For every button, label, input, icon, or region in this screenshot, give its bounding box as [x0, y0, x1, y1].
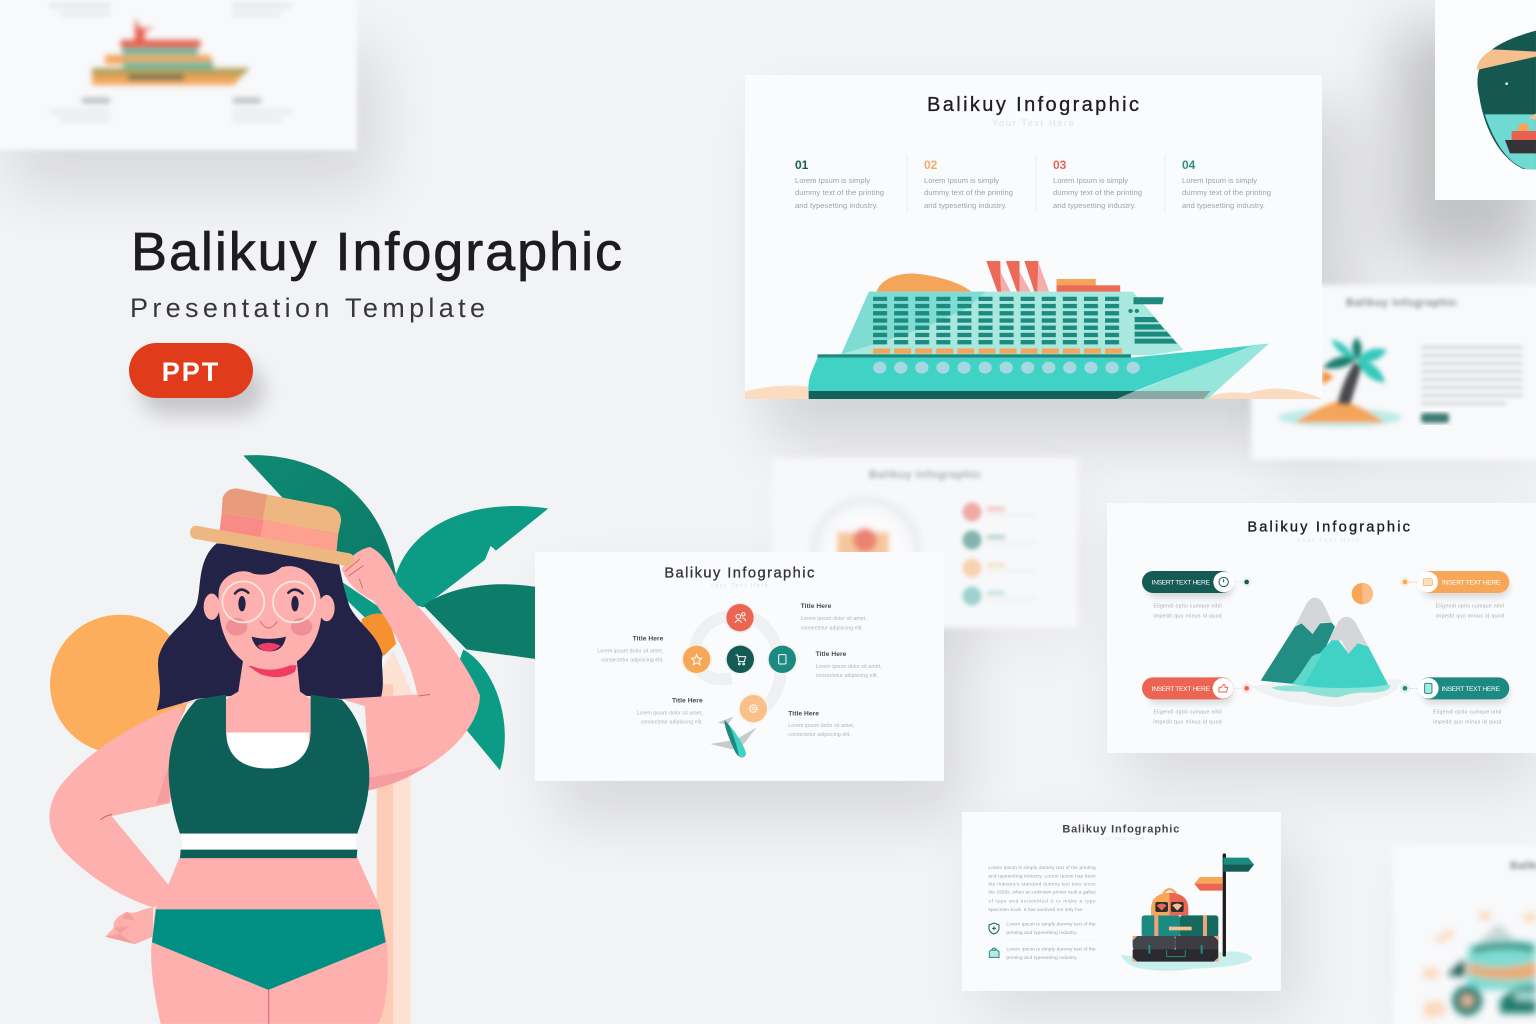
column 02: and typesetting industry. [924, 201, 1007, 210]
balconies [873, 348, 1125, 354]
panel: cruise ship slide [745, 75, 1322, 399]
cheeks [226, 618, 312, 636]
swim top [169, 694, 369, 834]
slide title: Balikuy Infographic [927, 94, 1139, 116]
slide title: Balikuy Infographic [1062, 823, 1179, 835]
paragraph [988, 865, 1096, 912]
column 02: dummy text of the printing [924, 188, 1013, 197]
label: left: Title Here [633, 636, 664, 643]
paragraph: the 1500s, when an unknown printer took a galley [988, 890, 1096, 895]
pill: dark top left [1142, 571, 1252, 598]
item two text: Lorem Ipsum is simply dummy text of the [1006, 946, 1096, 951]
column 01 [795, 158, 884, 210]
hair [157, 543, 383, 711]
captions [1153, 603, 1504, 725]
illustration: palm island [1278, 337, 1402, 427]
illustration: woman with palm and surfboard [49, 455, 548, 1024]
slide title: Balikuy Infographic [1247, 519, 1410, 535]
signpost [1194, 853, 1254, 957]
illustration: ship in sea blob [1477, 31, 1536, 169]
column 03: dummy text of the printing [1053, 188, 1142, 197]
node: people [725, 602, 755, 633]
slide subtitle: Your Text Here [1296, 537, 1360, 544]
label: right: Title Here [816, 651, 847, 658]
heading: blurred slide title: Balikuy Infographic [1346, 297, 1457, 309]
label: bottom left: Title Here [672, 698, 703, 705]
column 03: 03 [1053, 158, 1067, 172]
sun behind woman [50, 615, 190, 754]
surfboard [377, 651, 417, 1024]
neck shadow [248, 665, 297, 677]
pill: red bottom left [1142, 677, 1252, 704]
label: bottom right: Title Here [788, 710, 819, 717]
badge: PPT button [129, 343, 264, 415]
illustration: cruise ship [745, 261, 1322, 399]
illustration: luggage and signpost [1121, 853, 1254, 971]
slide subtitle: Your Text Here [992, 118, 1074, 129]
windows [873, 297, 1121, 345]
illustration: plane [710, 717, 757, 757]
label: bottom left [637, 698, 703, 726]
label: right: Lorem ipsum dolor sit amet, [816, 664, 882, 670]
label: left [597, 636, 664, 664]
palm leaves [243, 455, 548, 770]
left arm on hip [49, 701, 197, 908]
coconut [360, 613, 396, 656]
slide subtitle: Your Text Here [1098, 836, 1144, 841]
pill: teal bottom right [1400, 677, 1510, 704]
column 03 [1053, 158, 1142, 210]
label: bottom right [788, 710, 854, 738]
superstructure [841, 292, 1183, 355]
icon: shield [989, 923, 999, 934]
pill: dark top left: INSERT TEXT HERE [1152, 580, 1211, 587]
column 03: Lorem Ipsum is simply [1053, 176, 1128, 185]
pill: orange top right: INSERT TEXT HERE [1442, 580, 1501, 587]
paragraph: Lorem Ipsum is simply dummy text of the printing [988, 865, 1096, 870]
backpack [1151, 889, 1188, 915]
nose [260, 621, 277, 628]
mouth [252, 637, 286, 651]
item one text: Lorem Ipsum is simply dummy text of the [1006, 921, 1096, 926]
leg line [267, 990, 270, 1024]
captions: Eligendi optio cumque nihil [1433, 709, 1501, 715]
label: top right [801, 603, 867, 631]
text block: blurred paragraph [1421, 346, 1523, 405]
paragraph: of type and scrambled it to make a type [988, 899, 1096, 904]
column 04: 04 [1182, 158, 1196, 172]
illustration: blurred circle [814, 500, 918, 604]
item one text [1006, 921, 1096, 935]
badge: PPT button: PPT [162, 357, 220, 387]
label: left: Lorem ipsum dolor sit amet, [597, 648, 663, 654]
column 01: 01 [795, 158, 809, 172]
captions: Eligendi optio cumque nihil [1153, 709, 1222, 715]
captions: Eligendi optio cumque nihil [1436, 603, 1504, 609]
panel: blurred slide top right with blob [1435, 0, 1536, 200]
illustration: mountains [1252, 583, 1402, 707]
icon: camera bag [989, 948, 999, 957]
flight path [695, 615, 781, 717]
portholes [873, 362, 1140, 374]
label: left: consectetur adipiscing elit. [601, 658, 664, 664]
captions: impedit quo minus id quod [1153, 719, 1222, 725]
dark band [180, 850, 357, 858]
column 04: Lorem Ipsum is simply [1182, 176, 1257, 185]
pill: orange top right [1400, 571, 1510, 598]
panel: blurred map slide bottom right [1393, 845, 1536, 1024]
panel: blurred circle list slide [772, 458, 1078, 628]
face [218, 566, 322, 670]
column 04: dummy text of the printing [1182, 188, 1271, 197]
column 01: Lorem Ipsum is simply [795, 176, 870, 185]
panel: luggage slide [962, 812, 1281, 991]
column 02: 02 [924, 158, 938, 172]
label: bottom left: Lorem ipsum dolor sit amet, [637, 711, 703, 717]
bridge details [1128, 297, 1177, 344]
hull [808, 344, 1269, 399]
label: bottom left: consectetur adipiscing elit. [641, 720, 703, 726]
subheading: presentation template: Presentation Template [130, 293, 485, 323]
column 02: Lorem Ipsum is simply [924, 176, 999, 185]
panel: blurred yacht slide top left [0, 0, 357, 150]
paragraph: specimen book. It has survived not only five [988, 907, 1083, 912]
list: blurred coloured dots [962, 502, 1035, 606]
finger lines [345, 559, 430, 696]
panel: blurred island slide [1251, 285, 1536, 460]
swim bottom [152, 909, 386, 990]
node: cart [725, 644, 756, 675]
captions: impedit quo minus id quod [1433, 719, 1501, 725]
funnels [986, 261, 1049, 292]
heading: main title: Balikuy Infographic [131, 222, 622, 282]
label: top right: Title Here [801, 603, 832, 610]
eyes and brows [235, 590, 303, 611]
lower suitcase [1133, 936, 1218, 962]
panel: circular process slide [535, 552, 944, 781]
pill: red bottom left: INSERT TEXT HERE [1152, 686, 1211, 693]
slide subtitle: Your Text Here [710, 583, 769, 590]
item one text: printing and typesetting industry. [1006, 930, 1078, 935]
slide title: Balikuy Infographic [664, 566, 814, 582]
button: blurred dark pill [1421, 413, 1449, 423]
upper suitcase [1142, 915, 1218, 937]
label: top right: consectetur adipiscing elit. [801, 625, 863, 631]
label: right: consectetur adipiscing elit. [816, 673, 878, 679]
ears [204, 593, 335, 621]
raised arm [342, 547, 480, 790]
armpit shadow [156, 765, 169, 804]
neck [226, 659, 311, 739]
node: gear [738, 693, 769, 724]
heading: blurred slide title: Balikuy Infographic [869, 469, 981, 481]
glasses [222, 581, 315, 622]
illustration: blurred map and car [1423, 910, 1536, 1018]
column 04: and typesetting industry. [1182, 201, 1265, 210]
paragraph: and typesetting industry. Lorem Ipsum has been [988, 874, 1096, 879]
label: bottom right: consectetur adipiscing elit. [788, 732, 851, 738]
hat [196, 488, 348, 560]
node: tablet [767, 644, 798, 675]
elbow crease [101, 815, 112, 820]
column 02 [924, 158, 1013, 210]
column 01: and typesetting industry. [795, 201, 878, 210]
item two text [1006, 946, 1096, 960]
node: star [681, 644, 712, 675]
captions: impedit quo minus id quod [1153, 613, 1222, 619]
sand dunes [745, 386, 1322, 399]
column 04 [1182, 158, 1271, 210]
captions: Eligendi optio cumque nihil [1153, 603, 1222, 609]
label: right [816, 651, 882, 679]
white band [181, 834, 357, 850]
orange dome [876, 274, 973, 292]
hand on hip [105, 908, 153, 944]
column 03: and typesetting industry. [1053, 201, 1136, 210]
under-arm shade [368, 765, 428, 790]
paragraph: the industry's standard dummy text ever since [988, 882, 1096, 887]
top deck boxes [1057, 279, 1120, 292]
label: top right: Lorem ipsum dolor sit amet, [801, 616, 867, 622]
column 01: dummy text of the printing [795, 188, 884, 197]
pill: teal bottom right: INSERT TEXT HERE [1442, 686, 1501, 693]
white top detail [227, 733, 309, 768]
label: bottom right: Lorem ipsum dolor sit amet, [788, 723, 854, 729]
item two text: printing and typesetting industry. [1006, 955, 1078, 960]
captions: impedit quo minus id quod [1436, 613, 1504, 619]
panel: mountain slide [1107, 503, 1536, 753]
torso and legs [151, 856, 388, 1024]
